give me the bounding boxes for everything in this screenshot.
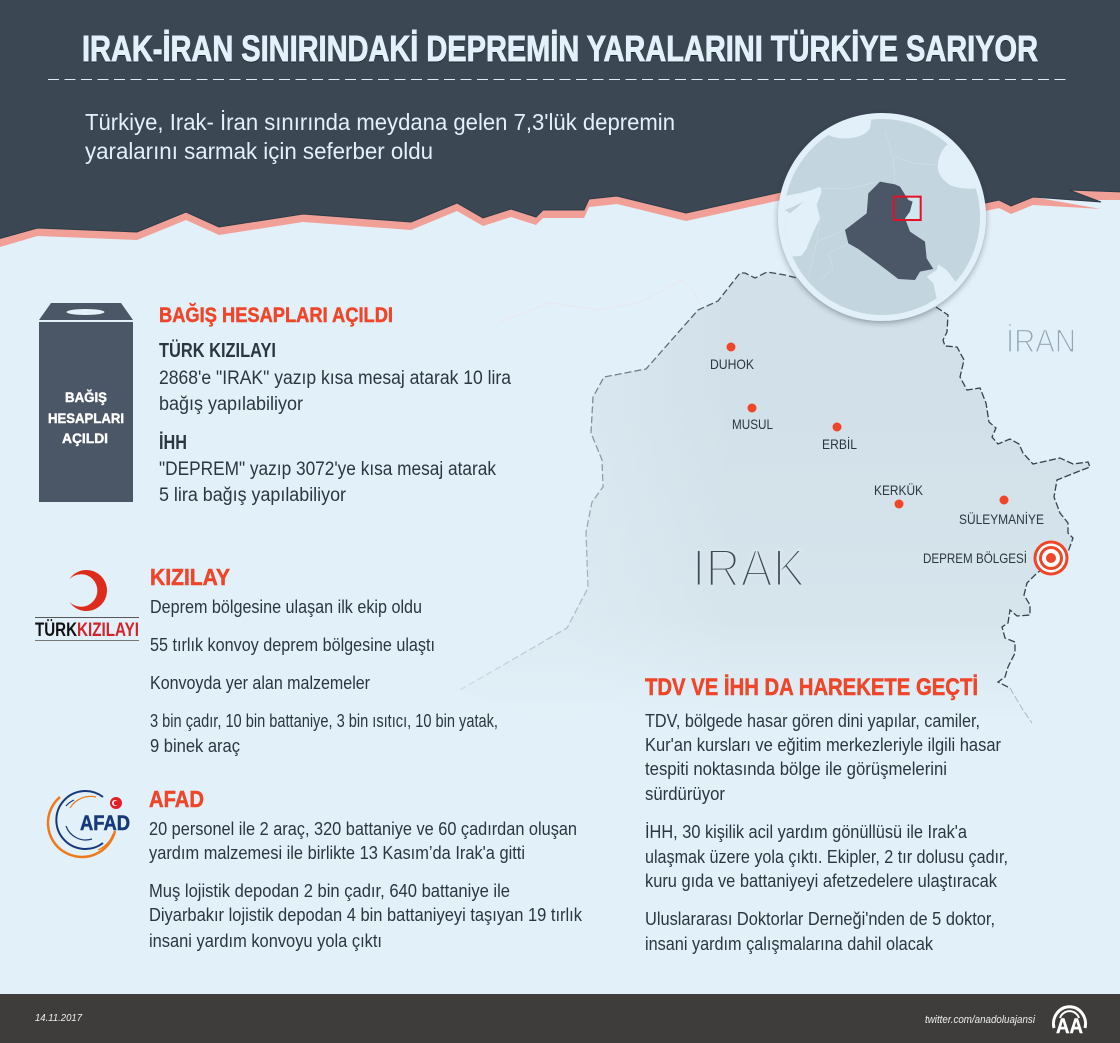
panel: Kizilay — [150, 564, 498, 756]
text block: Kizilay body: Deprem bölgesine ulaşan ilk ekip oldu — [150, 597, 422, 617]
city: Duhok — [710, 342, 755, 372]
logo: Turk Kizilayi — [35, 570, 139, 641]
text block: Turk Kizilayi: 2868'e "IRAK" yazıp kısa mesaj atarak 10 lira — [159, 368, 511, 389]
text block: IHH: 5 lira bağış yapılabiliyor — [159, 485, 347, 506]
footer bar — [0, 994, 1120, 1043]
header band with torn edge — [0, 0, 1120, 247]
city: Kerkuk: KERKÜK — [874, 481, 924, 498]
text block: IHH volunteers: ulaşmak üzere yola çıktı. Ekipler, 2 tır dolusu çadır, — [645, 847, 1008, 867]
text block: Kizilay body: Konvoyda yer alan malzemeler — [150, 673, 370, 693]
logo: Turk Kizilayi: TÜRK — [35, 620, 77, 641]
text block: AFAD body — [149, 819, 583, 951]
text block: IHH volunteers: İHH, 30 kişilik acil yardım gönüllüsü ile Irak'a — [645, 822, 968, 842]
social handle: twitter.com/anadoluajansi — [925, 1014, 1035, 1026]
logo: AFAD — [48, 791, 130, 857]
locator globe — [773, 113, 1000, 321]
label: earthquake zone: DEPREM BÖLGESİ — [923, 549, 1027, 566]
city: Suleymaniye: SÜLEYMANİYE — [959, 510, 1044, 527]
panel: donation accounts — [159, 303, 511, 506]
text block: AFAD body: Muş lojistik depodan 2 bin çadır, 640 battaniye ile — [149, 881, 510, 901]
heading: TDV and IHH: TDV VE İHH DA HAREKETE GEÇTİ — [645, 674, 978, 701]
city: Erbil — [822, 422, 857, 452]
text block: IHH: "DEPREM" yazıp 3072'ye kısa mesaj atarak — [159, 459, 496, 480]
text block: IHH: İHH — [159, 431, 187, 454]
text block: AFAD body: Diyarbakır lojistik depodan 4 bin battaniyeyi taşıyan 19 tırlık — [149, 905, 583, 925]
label: IRAN: İRAN — [1006, 323, 1076, 359]
text block: TDV: tespiti noktasında bölge ile görüşmelerini — [645, 759, 947, 779]
icon: donation box: BAĞIŞ — [65, 388, 107, 405]
city: Erbil: ERBİL — [822, 435, 857, 452]
text block: Kizilay body: 55 tırlık konvoy deprem bölgesine ulaştı — [150, 635, 435, 655]
icon: donation box — [39, 303, 133, 502]
city: Musul: MUSUL — [732, 416, 773, 432]
city: Duhok: DUHOK — [710, 356, 755, 372]
text block: Kizilay body: 9 binek araç — [150, 736, 240, 756]
date: 14.11.2017 — [35, 1013, 82, 1024]
subtitle: Türkiye, Irak- İran sınırında meydana gelen 7,3'lük depremin — [85, 109, 675, 135]
panel: TDV and IHH — [645, 674, 1008, 954]
city: Kerkuk — [874, 481, 924, 508]
panel: AFAD — [149, 786, 583, 951]
text block: Kizilay body — [150, 597, 498, 756]
text block: TDV — [645, 711, 1001, 804]
text block: TDV: Kur'an kursları ve eğitim merkezleriyle ilgili hasar — [645, 735, 1001, 755]
heading: Kizilay: KIZILAY — [150, 564, 230, 590]
text block: doctors — [645, 909, 995, 954]
text block: TDV: TDV, bölgede hasar gören dini yapılar, camiler, — [645, 711, 980, 731]
label: IRAK: IRAK — [692, 539, 805, 598]
subtitle — [85, 109, 675, 164]
icon: donation box: AÇILDI — [62, 430, 108, 446]
logo: Turk Kizilayi: KIZILAYI — [77, 620, 139, 641]
text block: doctors: insani yardım çalışmalarına dahil olacak — [645, 934, 934, 954]
text block: doctors: Uluslararası Doktorlar Derneği'nden de 5 doktor, — [645, 909, 995, 929]
heading: AFAD: AFAD — [149, 786, 204, 812]
heading: donation accounts: BAĞIŞ HESAPLARI AÇILDI — [159, 303, 393, 327]
text block: AFAD body: yardım malzemesi ile birlikte 13 Kasım’da Irak'a gitti — [149, 843, 525, 863]
text block: Kizilay body: 3 bin çadır, 10 bin battaniye, 3 bin ısıtıcı, 10 bin yatak, — [150, 711, 498, 731]
text block: TDV: sürdürüyor — [645, 784, 725, 804]
text block: Turk Kizilayi: bağış yapılabiliyor — [159, 394, 304, 415]
text block: IHH — [159, 431, 496, 506]
city: Musul — [732, 404, 773, 432]
logo: Anadolu Agency — [1054, 1007, 1086, 1038]
map: Iraq region — [460, 272, 1090, 728]
subtitle: yaralarını sarmak için seferber oldu — [85, 138, 433, 164]
text block: IHH volunteers: kuru gıda ve battaniyeyi afetzedelere ulaştıracak — [645, 871, 998, 891]
icon: epicenter target — [1034, 540, 1068, 576]
city: Suleymaniye — [959, 496, 1044, 527]
logo: Anadolu Agency: AA — [1056, 1015, 1083, 1038]
text block: AFAD body: 20 personel ile 2 araç, 320 battaniye ve 60 çadırdan oluşan — [149, 819, 577, 839]
text block: AFAD body: insani yardım konvoyu yola çıktı — [149, 931, 382, 951]
text block: Turk Kizilayi: TÜRK KIZILAYI — [159, 339, 276, 362]
text block: Turk Kizilayi — [159, 339, 511, 415]
icon: donation box: HESAPLARI — [48, 410, 124, 426]
logo: AFAD: AFAD — [80, 812, 130, 835]
text block: IHH volunteers — [645, 822, 1008, 891]
